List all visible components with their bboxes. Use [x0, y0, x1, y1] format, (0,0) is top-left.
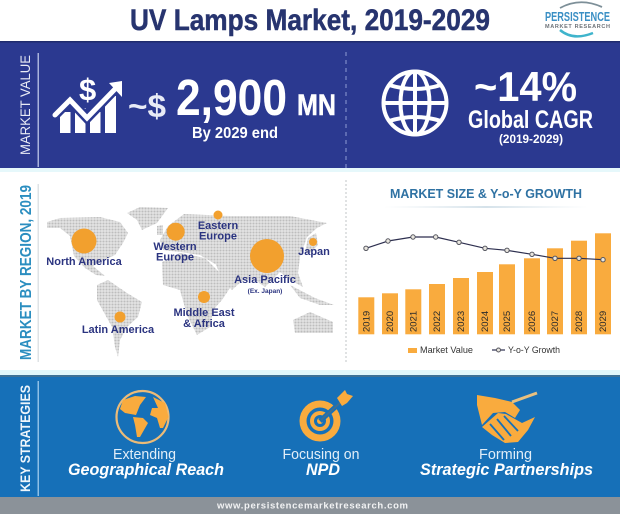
logo: Persistence Market Research	[545, 2, 610, 36]
panel: market size and growth chart	[346, 180, 611, 362]
bar year labels: 2022	[432, 311, 443, 332]
icon: rising chart with dollar	[55, 72, 122, 133]
legend	[408, 345, 560, 356]
bar year labels: 2024	[480, 311, 491, 332]
label: market value: MARKET VALUE	[17, 55, 33, 155]
bar year labels: 2028	[574, 311, 585, 332]
map labels: Europe	[156, 252, 194, 264]
map labels: North America	[46, 256, 123, 268]
value: 14%: ~14%	[474, 63, 577, 110]
strategy: strategic partnerships: Strategic Partnerships	[420, 460, 593, 479]
strategy: NPD: Focusing on	[282, 447, 360, 463]
panel: key strategies	[0, 375, 620, 497]
value: 2,900 MN: 2,900	[176, 69, 287, 126]
map labels: Middle East	[173, 307, 235, 319]
footer: www.persistencemarketresearch.com	[216, 500, 408, 512]
logo: Persistence Market Research: MARKET RESEARCH	[545, 24, 610, 30]
bar year labels: 2027	[550, 311, 561, 332]
map labels: Japan	[298, 246, 330, 258]
strategy: geographical reach	[68, 447, 224, 479]
strategy: geographical reach: Extending	[113, 447, 176, 463]
text: period: (2019-2029)	[499, 134, 563, 146]
strategy: strategic partnerships	[420, 447, 593, 479]
icon: target with arrow	[300, 390, 353, 442]
bar year labels: 2025	[502, 311, 513, 332]
bar year labels: 2020	[385, 311, 396, 332]
strategy: geographical reach: Geographical Reach	[68, 460, 224, 479]
bar chart	[358, 233, 611, 334]
legend: Y-o-Y Growth	[508, 345, 560, 356]
bar year labels	[362, 311, 609, 332]
bar year labels: 2023	[456, 311, 467, 332]
bar year labels: 2029	[598, 311, 609, 332]
map labels: Eastern	[198, 220, 238, 232]
strategy: NPD: NPD	[306, 460, 340, 479]
strategy: strategic partnerships: Forming	[479, 447, 532, 463]
map labels: (Ex. Japan)	[248, 288, 282, 295]
icon: earth	[116, 391, 168, 443]
footer	[0, 497, 620, 514]
value: 2,900 MN: MN	[297, 89, 336, 122]
band: light separator	[0, 168, 620, 376]
map labels: Asia Pacific	[234, 274, 296, 286]
text: by 2029 end: By 2029 end	[192, 125, 278, 142]
map: dotted world map	[47, 207, 334, 357]
map labels: Latin America	[82, 324, 155, 336]
title: UV Lamps Market, 2019-2029	[130, 4, 490, 37]
map labels	[46, 220, 330, 336]
map labels: & Africa	[183, 318, 226, 330]
bar year labels: 2019	[362, 311, 372, 332]
text: approx dollar: ~$	[128, 88, 166, 124]
bar year labels: 2021	[408, 311, 420, 332]
map labels: Europe	[199, 230, 237, 242]
chart title: MARKET SIZE & Y-o-Y GROWTH	[390, 186, 582, 201]
panel: market by region	[18, 184, 334, 362]
icon: handshake	[477, 393, 537, 443]
strategy: NPD	[282, 447, 360, 479]
label: market by region: MARKET BY REGION, 2019	[18, 185, 35, 360]
icon: rising chart with dollar: $	[79, 72, 96, 107]
icon: globe	[384, 71, 446, 135]
bubbles: regional market size	[72, 210, 317, 322]
bar year labels: 2026	[527, 311, 538, 332]
map labels: Western	[153, 241, 197, 253]
legend: Market Value	[420, 345, 473, 356]
panel: market value	[0, 41, 620, 168]
label: key strategies: KEY STRATEGIES	[17, 385, 33, 492]
line chart: y-o-y growth	[364, 235, 605, 262]
